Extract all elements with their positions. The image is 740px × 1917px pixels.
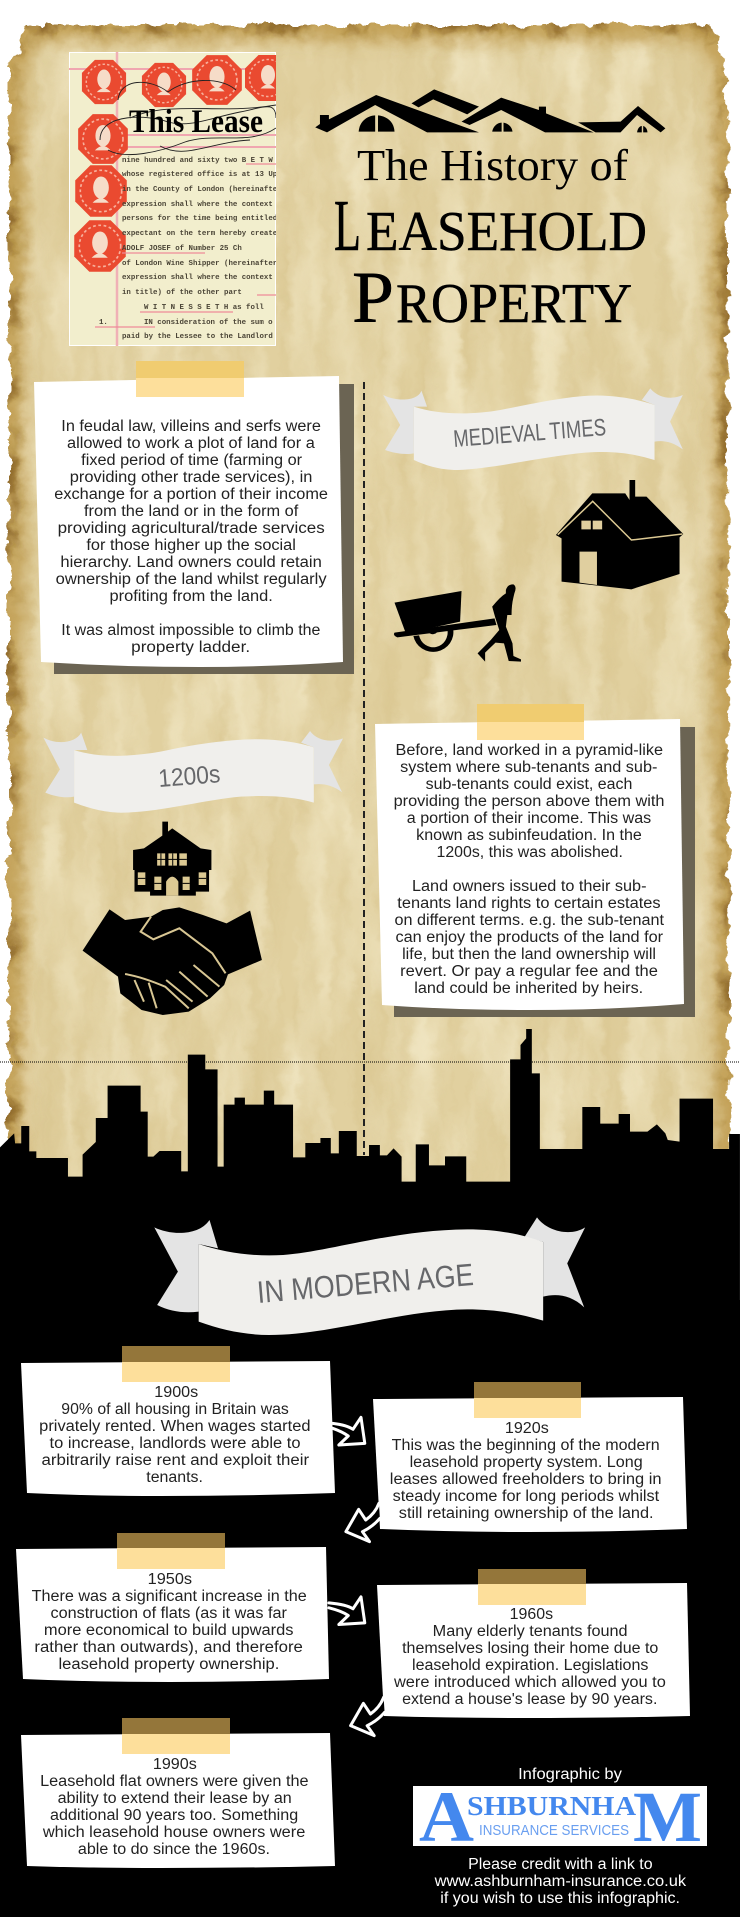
arrow: 1900s to 1920s	[333, 1417, 365, 1445]
note text: still retaining ownership of the land.	[399, 1505, 654, 1522]
icon: handshake	[83, 907, 262, 1015]
note text: 1950s	[148, 1571, 192, 1588]
credit text: if you wish to use this infographic.	[440, 1890, 680, 1907]
note text: rather than outwards), and therefore	[34, 1639, 303, 1656]
arrow: 1950s to 1960s	[329, 1597, 365, 1624]
note text: 90% of all housing in Britain was	[61, 1401, 289, 1418]
lease document image	[69, 52, 291, 346]
note text: hierarchy. Land owners could retain	[60, 554, 322, 571]
note text: able to do since the 1960s.	[78, 1841, 270, 1858]
arrow: 1960s to 1990s	[351, 1697, 385, 1736]
note text: tenants land rights to certain estates	[397, 895, 661, 912]
note text: known as subinfeudation. In the	[416, 827, 642, 844]
note text: 1960s	[510, 1606, 553, 1623]
note text: system where sub-tenants and sub-	[400, 759, 657, 776]
note text: more economical to build upwards	[44, 1622, 294, 1639]
banner: 1200s	[43, 731, 343, 813]
title: L	[334, 185, 361, 266]
note text: leasehold expiration. Legislations	[412, 1657, 649, 1674]
note text: Land owners issued to their sub-	[412, 878, 646, 895]
lease document image: This Lease	[129, 104, 263, 140]
note text: arbitrarily raise rent and exploit their	[42, 1452, 309, 1469]
note text: There was a significant increase in the	[32, 1588, 307, 1605]
note text: additional 90 years too. Something	[50, 1807, 298, 1824]
lease document image: of London Wine Shipper (hereinafter	[122, 260, 277, 268]
arrow: 1920s to 1950s	[346, 1503, 380, 1542]
tape	[474, 1382, 581, 1418]
note text: revert. Or pay a regular fee and the	[400, 963, 658, 980]
logo: Ashburnham Insurance Services: INSURANCE SERVICES	[479, 1822, 629, 1839]
note text: were introduced which allowed you to	[393, 1674, 666, 1691]
panel: 1900s note	[21, 1346, 335, 1496]
note text: themselves losing their home due to	[402, 1640, 658, 1657]
lease document image: expectant on the term hereby create	[122, 230, 278, 238]
note text: Many elderly tenants found	[433, 1623, 628, 1640]
note text: construction of flats (as it was far	[50, 1605, 287, 1622]
note text: leases allowed freeholders to bring in	[390, 1471, 662, 1488]
note text: land could be inherited by heirs.	[414, 980, 643, 997]
logo: Ashburnham Insurance Services: M	[633, 1777, 702, 1857]
lease document image: whose registered office is at 13 Up	[122, 171, 278, 179]
note text: property ladder.	[131, 639, 250, 656]
lease document image: persons for the time being entitled	[122, 215, 277, 223]
note text: a portion of their income. This was	[407, 810, 651, 827]
note text: exchange for a portion of their income	[54, 486, 328, 503]
tape	[477, 704, 584, 740]
note text	[32, 1571, 307, 1673]
logo: Ashburnham Insurance Services: SHBURNHA	[467, 1791, 637, 1821]
title	[334, 141, 647, 338]
lease document image: W I T N E S S E T H as foll	[144, 304, 264, 312]
note text: can enjoy the products of the land for	[396, 929, 663, 946]
note text	[39, 1384, 310, 1486]
tape	[122, 1718, 230, 1754]
note text: on different terms. e.g. the sub-tenant	[394, 912, 665, 929]
tape	[122, 1346, 230, 1382]
note text: 1990s	[153, 1756, 197, 1773]
lease document image: ADOLF JOSEF of Number 25 Ch	[122, 245, 242, 253]
title: ROPERTY	[396, 273, 632, 335]
credit text: Please credit with a link to	[468, 1856, 653, 1873]
panel: subinfeudation note	[375, 704, 695, 1017]
note text: providing the person above them with	[394, 793, 664, 810]
icon: rooftops logo	[315, 89, 665, 132]
note text: In feudal law, villeins and serfs were	[61, 418, 321, 435]
note text: privately rented. When wages started	[39, 1418, 310, 1435]
logo: Ashburnham Insurance Services: A	[419, 1777, 474, 1857]
note text: leasehold property ownership.	[58, 1656, 279, 1673]
tape	[478, 1569, 586, 1605]
note text: to increase, landlords were able to	[50, 1435, 300, 1452]
note text: for those higher up the social	[86, 537, 296, 554]
skyline silhouette	[0, 1029, 740, 1917]
note text: ownership of the land whilst regularly	[56, 571, 327, 588]
lease document image: 1.	[99, 319, 108, 327]
note text: allowed to work a plot of land for a	[67, 435, 315, 452]
tape	[136, 361, 244, 397]
note text	[390, 1420, 662, 1522]
banner: in modern age: IN MODERN AGE	[256, 1257, 475, 1310]
lease document image: in title) of the other part	[122, 289, 242, 297]
title: The History of	[357, 141, 628, 190]
timeline divider	[363, 382, 365, 1155]
panel: feudal law note	[34, 361, 354, 674]
lease document image: nine hundred and sixty two B E T W	[122, 157, 273, 165]
note text: Leasehold flat owners were given the	[40, 1773, 309, 1790]
note text: 1920s	[505, 1420, 549, 1437]
note text: It was almost impossible to climb the	[61, 622, 320, 639]
panel: 1920s note	[373, 1382, 687, 1532]
note text: providing agricultural/trade services	[58, 520, 325, 537]
note text: tenants.	[146, 1469, 203, 1486]
banner: in modern age	[154, 1217, 585, 1335]
banner: medieval times: MEDIEVAL TIMES	[452, 414, 607, 453]
banner: medieval times	[383, 388, 683, 470]
parchment background	[0, 0, 740, 1230]
note text: from the land or in the form of	[84, 503, 299, 520]
note text: life, but then the land ownership will	[402, 946, 656, 963]
note text: which leasehold house owners were	[42, 1824, 305, 1841]
note text: 1900s	[154, 1384, 198, 1401]
note text	[54, 418, 328, 656]
note text	[393, 1606, 666, 1708]
note text: extend a house's lease by 90 years.	[402, 1691, 657, 1708]
lease document image: expression shall where the context	[122, 201, 273, 209]
icon: man pulling wheelbarrow	[394, 584, 521, 662]
note text: steady income for long periods whilst	[393, 1488, 660, 1505]
note text: leasehold property system. Long	[410, 1454, 643, 1471]
note text: Before, land worked in a pyramid-like	[396, 742, 663, 759]
lease document image: paid by the Lessee to the Landlord	[122, 333, 273, 341]
note text	[394, 742, 665, 997]
note text: profiting from the land.	[110, 588, 273, 605]
note text	[40, 1756, 309, 1858]
logo: Ashburnham Insurance Services	[413, 1777, 707, 1857]
note text: sub-tenants could exist, each	[426, 776, 632, 793]
title: P	[352, 257, 394, 338]
icon: small manor house	[133, 822, 211, 896]
panel: 1960s note	[377, 1569, 690, 1718]
credit text	[434, 1856, 686, 1907]
note text: fixed period of time (farming or	[81, 452, 302, 469]
icon: house	[556, 480, 683, 589]
panel: 1990s note	[21, 1718, 335, 1868]
note text: ability to extend their lease by an	[58, 1790, 292, 1807]
title: EASEHOLD	[366, 201, 647, 263]
banner: 1200s: 1200s	[157, 760, 221, 793]
tape	[117, 1533, 225, 1569]
note text: providing other trade services), in	[70, 469, 312, 486]
era divider	[0, 1061, 740, 1063]
note text: 1200s, this was abolished.	[436, 844, 623, 861]
credit text: www.ashburnham-insurance.co.uk	[434, 1873, 686, 1890]
credit: infographic by: Infographic by	[518, 1766, 622, 1783]
lease document image: expression shall where the context	[122, 274, 273, 282]
note text: This was the beginning of the modern	[392, 1437, 660, 1454]
panel: 1950s note	[16, 1533, 329, 1682]
lease document image: in the County of London (hereinafte	[122, 186, 278, 194]
lease document image: IN consideration of the sum o	[144, 319, 273, 327]
